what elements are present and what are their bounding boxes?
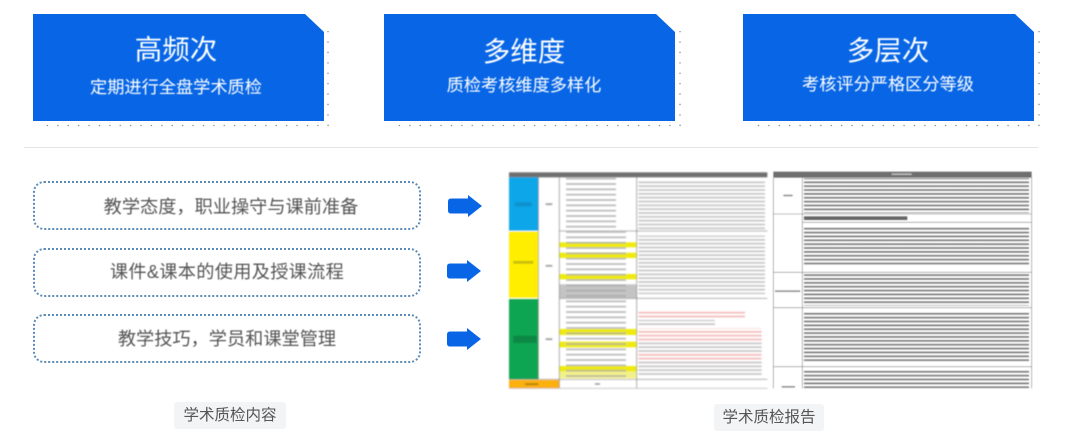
item: teaching skills: 教学技巧，学员和课堂管理 bbox=[118, 329, 336, 349]
chart: written feedback report bbox=[772, 171, 1033, 389]
arrow: row 3 bbox=[447, 328, 481, 350]
caption: inspection report bbox=[714, 404, 824, 431]
item: teaching attitude bbox=[33, 181, 421, 230]
card: high frequency bbox=[33, 14, 324, 121]
card heading: multi-dimensional: 多维度 bbox=[483, 36, 565, 67]
card subtext: multi-level: 考核评分严格区分等级 bbox=[802, 74, 974, 94]
card: multi-level bbox=[743, 14, 1034, 121]
arrow: row 2 bbox=[447, 260, 481, 282]
item: teaching skills bbox=[33, 314, 421, 363]
card heading: multi-level: 多层次 bbox=[847, 35, 929, 66]
caption: inspection content: 学术质检内容 bbox=[183, 407, 276, 424]
card subtext: high frequency: 定期进行全盘学术质检 bbox=[90, 77, 262, 97]
chart: rubric table report bbox=[508, 171, 768, 390]
item: courseware use bbox=[33, 248, 421, 297]
card: multi-dimensional bbox=[384, 14, 675, 121]
caption: inspection content bbox=[174, 402, 286, 429]
item: teaching attitude: 教学态度，职业操守与课前准备 bbox=[104, 197, 358, 217]
caption: inspection report: 学术质检报告 bbox=[722, 409, 816, 426]
card heading: high frequency: 高频次 bbox=[135, 34, 217, 65]
arrow: row 1 bbox=[448, 195, 482, 217]
card subtext: multi-dimensional: 质检考核维度多样化 bbox=[447, 75, 601, 95]
item: courseware use: 课件&课本的使用及授课流程 bbox=[110, 262, 344, 282]
